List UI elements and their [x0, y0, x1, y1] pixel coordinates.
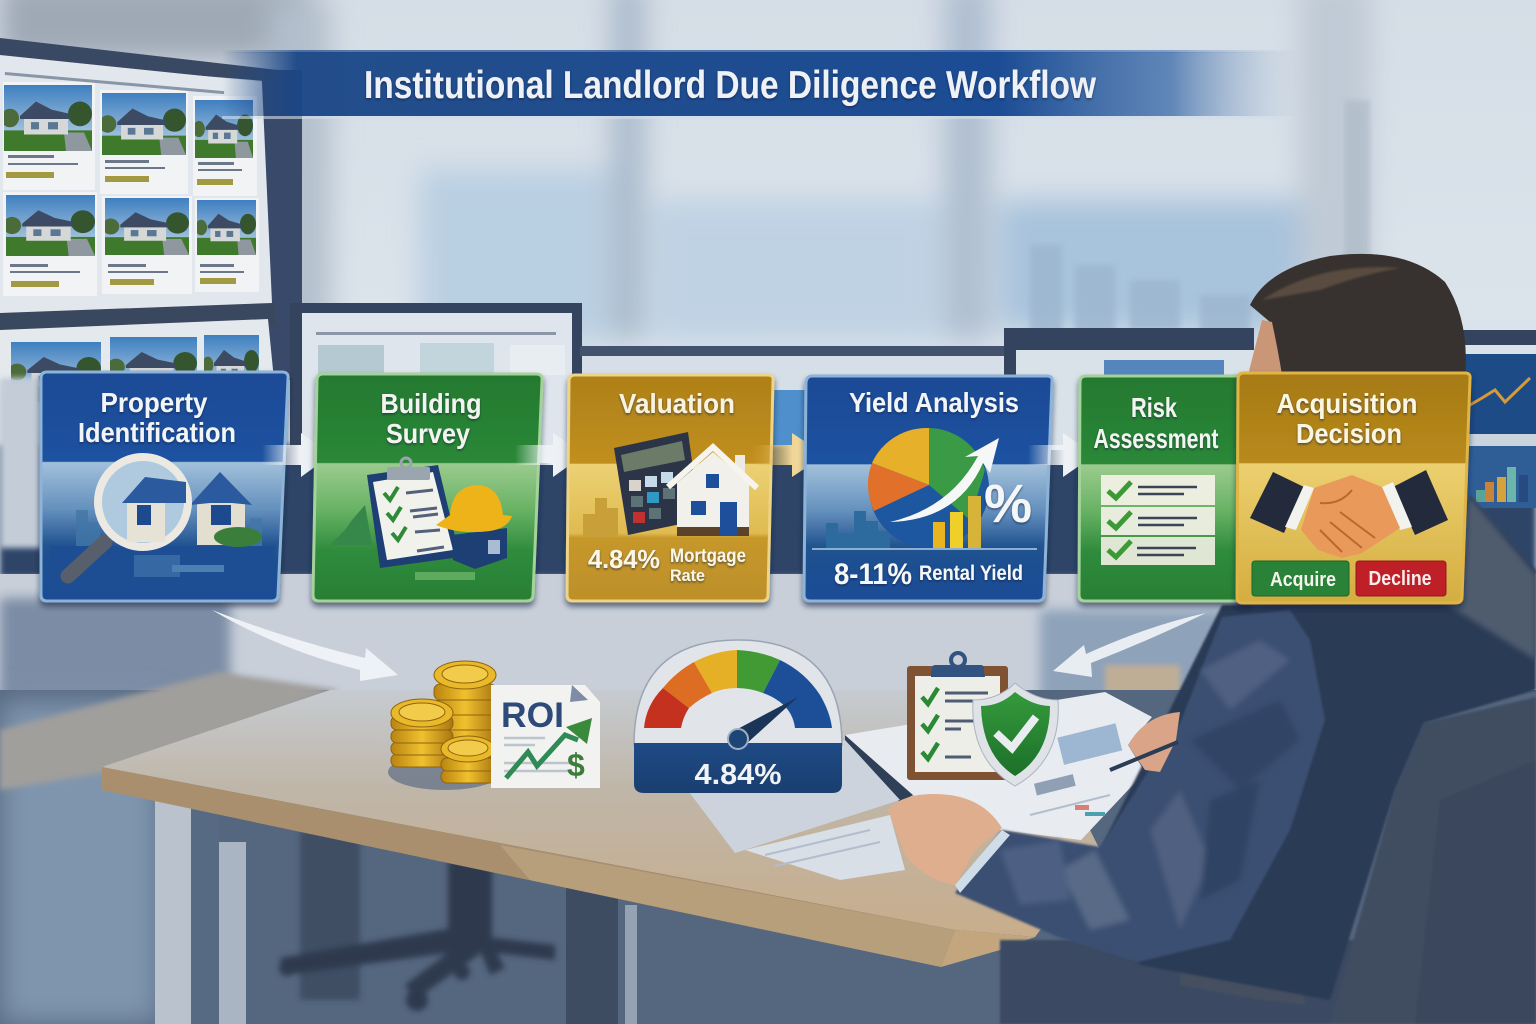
heading: Building Survey	[380, 388, 482, 449]
panel: Acquisition Decision	[1237, 373, 1470, 603]
panel: Valuation	[567, 375, 773, 601]
icon: handshake	[1250, 470, 1448, 558]
panel: Building Survey	[313, 374, 542, 601]
arrow: yield to risk	[1028, 433, 1095, 477]
icon: risk checklist	[1101, 475, 1215, 565]
left hand	[888, 794, 1002, 885]
heading: Acquisition Decision	[1276, 388, 1418, 449]
stat: mortgage rate: 4.84%	[588, 544, 660, 574]
icon: ROI coins and report: ROI	[501, 696, 564, 735]
button: Acquire: Acquire	[1270, 569, 1336, 591]
heading: Acquisition Decision: Decision	[1296, 418, 1402, 449]
icon: calculator and house	[583, 432, 757, 537]
suit sleeve	[955, 610, 1325, 962]
panel: Yield Analysis	[804, 376, 1052, 601]
dark band behind panels	[0, 445, 1536, 577]
panel: Property Identification	[41, 372, 288, 601]
torso	[1100, 495, 1536, 1000]
hair	[1250, 254, 1466, 378]
icon: clipboard and shield	[907, 653, 1058, 786]
heading: Valuation: Valuation	[619, 388, 735, 419]
heading: Property Identification: Identification	[78, 417, 236, 448]
arrow: survey to valuation	[515, 433, 584, 477]
desk and floor	[0, 574, 1536, 1024]
arrow: valuation to yield	[752, 433, 825, 477]
papers on desk	[680, 692, 1152, 880]
chart: rate gauge	[634, 640, 842, 793]
icon: magnifier over houses	[50, 457, 274, 592]
icon: checklist and hard hat	[330, 458, 512, 580]
heading: Building Survey: Building	[380, 388, 482, 419]
person at desk	[888, 254, 1536, 1024]
arrow: down to risk shield	[1053, 613, 1206, 677]
heading: Yield Analysis: Yield Analysis	[849, 387, 1019, 418]
heading: Risk Assessment	[1094, 392, 1218, 454]
heading: Acquisition Decision: Acquisition	[1276, 388, 1418, 419]
right hand and pen	[1128, 712, 1180, 772]
title: Institutional Landlord Due Diligence Workflow	[364, 64, 1097, 107]
title banner	[222, 50, 1302, 119]
arrow: down to ROI	[212, 610, 398, 681]
button: Decline: Decline	[1368, 568, 1432, 590]
stat: rental yield	[834, 558, 1023, 591]
icon: ROI coins and report	[388, 661, 600, 790]
stat: mortgage rate: Mortgage	[670, 546, 746, 567]
lower monitors behind workflow	[0, 303, 1536, 548]
office chair under desk	[279, 830, 555, 1011]
chair	[1000, 697, 1536, 1024]
stat: mortgage rate: Rate	[670, 566, 705, 585]
heading: Building Survey: Survey	[386, 418, 470, 449]
arrow: identification to survey	[262, 433, 331, 477]
heading: Property Identification	[78, 387, 236, 448]
stat: rental yield: 8-11%	[834, 558, 912, 591]
icon: ROI coins and report: $	[567, 747, 585, 783]
heading: Property Identification: Property	[100, 387, 208, 418]
heading: Risk Assessment: Risk	[1131, 392, 1177, 423]
icon: pie chart with rising arrow	[812, 428, 1037, 550]
stat: rental yield: Rental Yield	[919, 562, 1023, 585]
icon: pie chart with rising arrow: %	[984, 474, 1032, 534]
table legs	[155, 800, 637, 1024]
button: Acquire	[1252, 561, 1349, 596]
monitors: property listings wall	[0, 38, 302, 380]
heading: Risk Assessment: Assessment	[1094, 423, 1218, 454]
panel: Risk Assessment	[1079, 376, 1250, 601]
gauge value: 4.84%	[694, 759, 782, 791]
button: Decline	[1356, 561, 1446, 596]
desk top	[102, 690, 1100, 937]
stat: mortgage rate	[588, 544, 746, 585]
face side	[1248, 320, 1282, 375]
